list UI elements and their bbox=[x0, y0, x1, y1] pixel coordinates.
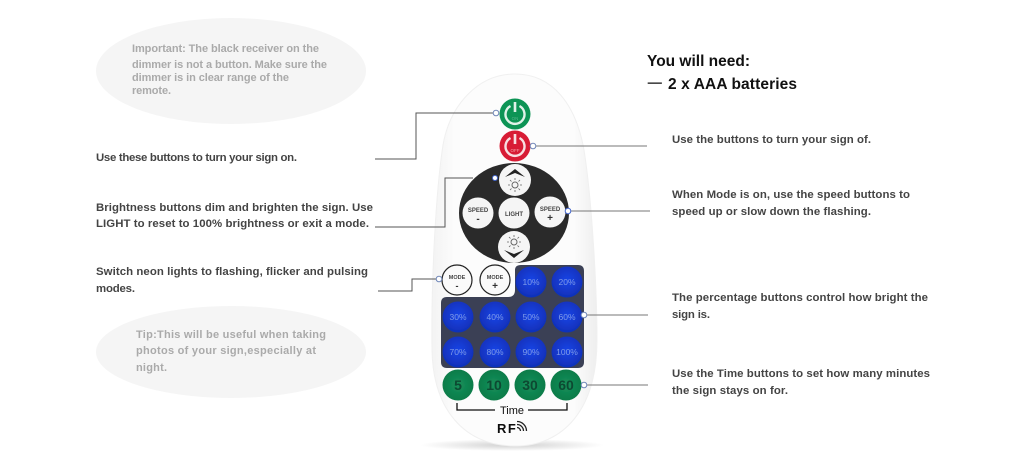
label: percentage buttons: sign is. bbox=[672, 309, 710, 321]
speed plus button: + bbox=[547, 213, 553, 224]
light button: LIGHT bbox=[505, 212, 523, 218]
time bracket: Time bbox=[500, 405, 524, 417]
time buttons: 5 bbox=[454, 377, 462, 393]
note: tip: photos of your sign,especially at bbox=[136, 345, 316, 357]
power off button: OFF bbox=[510, 148, 520, 153]
black receiver pad bbox=[459, 163, 569, 263]
mode plus button bbox=[480, 265, 510, 295]
note: important bbox=[96, 18, 366, 124]
leader line: on bbox=[375, 110, 499, 159]
time buttons: 10 bbox=[486, 377, 502, 393]
note: important: remote. bbox=[132, 85, 171, 97]
remote control bbox=[420, 74, 604, 451]
percentage buttons: 90% bbox=[522, 347, 540, 357]
percentage buttons: 70% bbox=[449, 347, 467, 357]
note: tip: night. bbox=[136, 362, 167, 374]
power off button bbox=[500, 130, 530, 162]
speed minus button: - bbox=[476, 214, 480, 225]
note: important: Important: The black receiver on the bbox=[132, 43, 319, 55]
speed plus button: SPEED bbox=[540, 207, 561, 213]
time buttons: 60 bbox=[558, 377, 574, 393]
leader line: mode bbox=[378, 276, 442, 291]
leader line: brightness bbox=[375, 176, 498, 227]
note: tip bbox=[96, 306, 366, 398]
percent panel bbox=[441, 265, 584, 368]
remote shadow bbox=[420, 439, 604, 451]
power on button bbox=[500, 98, 530, 130]
note: tip: Tip:This will be useful when taking bbox=[136, 329, 326, 341]
label: on buttons: Use these buttons to turn your sign on. bbox=[96, 152, 297, 164]
label: brightness buttons: LIGHT to reset to 100% brightness or exit a mode. bbox=[96, 218, 369, 230]
time buttons: 30 bbox=[522, 377, 538, 393]
speed minus button: SPEED bbox=[468, 208, 489, 214]
mode plus button: + bbox=[492, 281, 498, 292]
percentage buttons: 80% bbox=[486, 347, 504, 357]
percentage buttons: 50% bbox=[522, 312, 540, 322]
percentage buttons: 30% bbox=[449, 312, 467, 322]
label: speed buttons: When Mode is on, use the speed buttons to bbox=[672, 189, 910, 201]
label: percentage buttons: The percentage buttons control how bright the bbox=[672, 292, 928, 304]
label: mode buttons: Switch neon lights to flashing, flicker and pulsing bbox=[96, 266, 368, 278]
label: speed buttons: speed up or slow down the flashing. bbox=[672, 206, 871, 218]
heading: you will need: 2 x AAA batteries bbox=[668, 76, 797, 93]
leader line: off bbox=[530, 143, 647, 149]
label: time buttons: Use the Time buttons to set how many minutes bbox=[672, 368, 930, 380]
brightness down button bbox=[498, 231, 530, 263]
time buttons bbox=[442, 370, 582, 400]
percentage buttons bbox=[442, 266, 582, 368]
percentage buttons: 20% bbox=[558, 277, 576, 287]
percentage buttons: 100% bbox=[556, 347, 578, 357]
rf logo bbox=[497, 421, 526, 436]
percentage buttons: 40% bbox=[486, 312, 504, 322]
heading: you will need: 一 bbox=[647, 76, 663, 93]
speed plus button bbox=[534, 196, 566, 228]
note: important: dimmer is in clear range of the bbox=[132, 72, 289, 84]
brightness up button bbox=[499, 164, 531, 196]
mode plus button: MODE bbox=[487, 275, 504, 281]
leader line: time bbox=[581, 382, 648, 388]
percentage buttons: 60% bbox=[558, 312, 576, 322]
power on button: ON bbox=[512, 116, 518, 121]
label: brightness buttons: Brightness buttons dim and brighten the sign. Use bbox=[96, 202, 373, 214]
label: off buttons: Use the buttons to turn your sign of. bbox=[672, 134, 871, 146]
light button bbox=[498, 198, 530, 228]
leader line: percentage bbox=[581, 312, 648, 318]
time bracket bbox=[457, 403, 567, 417]
percentage buttons: 10% bbox=[522, 277, 540, 287]
label: time buttons: the sign stays on for. bbox=[672, 385, 788, 397]
speed minus button bbox=[462, 198, 494, 228]
heading: you will need: You will need: bbox=[647, 53, 750, 70]
mode minus button bbox=[442, 265, 472, 295]
rf logo: RF bbox=[497, 421, 517, 436]
note: important: dimmer is not a button. Make sure the bbox=[132, 59, 327, 71]
mode minus button: MODE bbox=[449, 275, 466, 281]
mode minus button: - bbox=[456, 281, 458, 291]
leader line: speed bbox=[565, 208, 650, 214]
remote body bbox=[432, 74, 597, 446]
label: mode buttons: modes. bbox=[96, 283, 135, 295]
